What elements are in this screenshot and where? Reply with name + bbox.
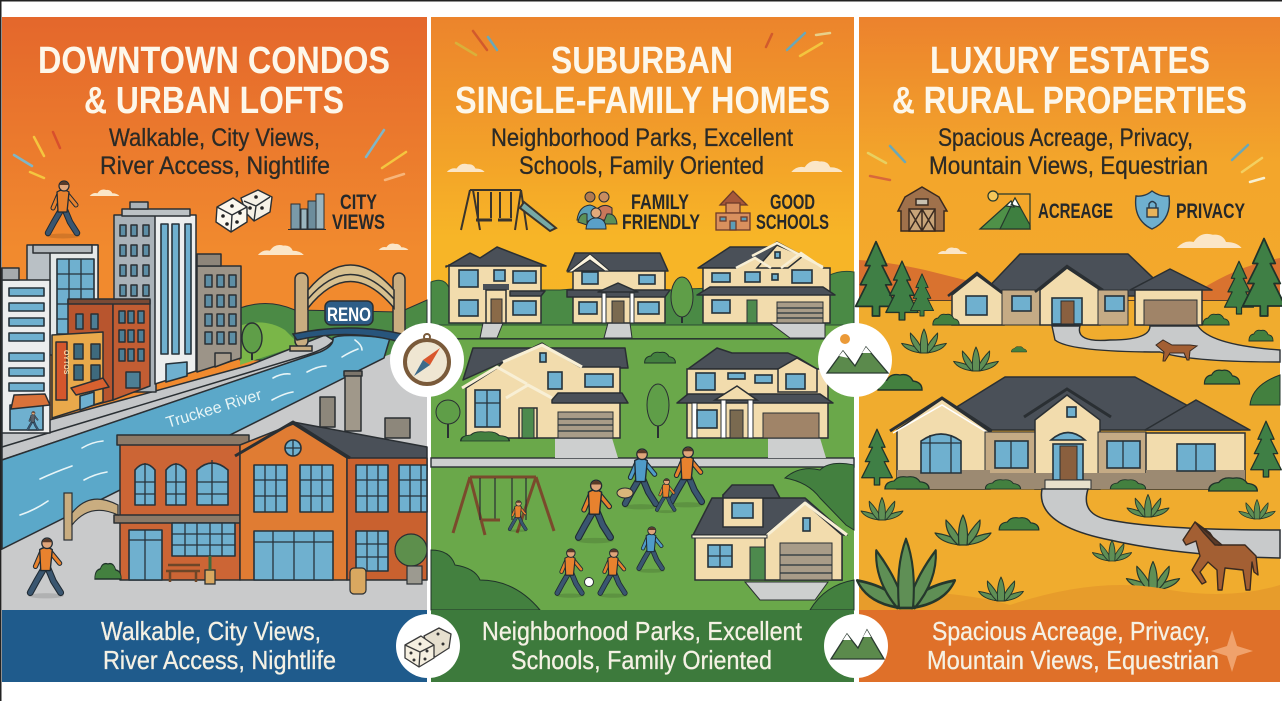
label: family friendly: FAMILY [631, 191, 689, 214]
gateway arch sign [64, 493, 118, 540]
potted tree [395, 534, 427, 584]
label: good schools [756, 191, 829, 234]
estate: upper house [948, 254, 1212, 325]
title [892, 40, 1247, 122]
badge: mountains, footer [824, 614, 888, 678]
tree [242, 323, 262, 360]
icon: swing and slide [461, 190, 556, 231]
building: white apartment block [2, 268, 50, 433]
driveway, upper [1052, 326, 1280, 362]
icon: privacy shield [1136, 191, 1169, 229]
agaves, upper yard [878, 329, 1280, 405]
label: city views: VIEWS [332, 211, 385, 234]
kerb line [2, 342, 332, 447]
tree and shrubs, middle row [436, 352, 675, 441]
footer band [859, 610, 1280, 682]
mailbox [350, 568, 366, 594]
badge: dice [396, 614, 460, 678]
footer band [431, 610, 854, 682]
house: top row, second [567, 253, 670, 323]
subtitle: Schools, Family Oriented [519, 152, 764, 180]
chimneys and vent [320, 371, 410, 438]
house: top row, third [697, 242, 835, 323]
building: tall tower [114, 202, 196, 392]
title [455, 40, 830, 122]
ground [2, 340, 427, 610]
house: lower right [692, 485, 847, 580]
clouds [938, 234, 1242, 254]
footer text: Walkable, City Views, [101, 616, 321, 646]
ground [859, 301, 1280, 610]
child on swing [509, 501, 527, 532]
sand dune foreground [859, 585, 1280, 610]
footer text: Spacious Acreage, Privacy, [932, 616, 1210, 646]
building: grey glass mid-rise [27, 245, 98, 355]
title: LUXURY ESTATES [930, 40, 1210, 82]
bench and planter [166, 556, 215, 584]
trees at right [785, 463, 854, 530]
pathways and road lines [431, 323, 854, 467]
river [2, 336, 390, 549]
hills [240, 300, 427, 360]
horse, upper [1156, 340, 1197, 361]
panel: luxury estates and rural properties [856, 17, 1282, 682]
people: adult and playing children [556, 480, 665, 598]
bushes foreground [431, 550, 854, 610]
label: good schools: GOOD [770, 191, 815, 214]
title: DOWNTOWN CONDOS [38, 40, 390, 82]
building: brick loft left block [114, 435, 249, 580]
subtitle: River Access, Nightlife [100, 152, 330, 180]
agaves, lower yard [861, 494, 1275, 601]
panel: downtown condos and urban lofts [2, 17, 427, 682]
icon: acreage mountains [980, 191, 1030, 229]
footer text: Mountain Views, Equestrian [927, 645, 1219, 675]
footer text: Neighborhood Parks, Excellent [482, 616, 803, 646]
driveway lower right [745, 582, 828, 600]
arch: Reno arch: RENO [327, 305, 371, 326]
label: privacy: PRIVACY [1176, 200, 1245, 223]
subtitle [929, 124, 1208, 180]
footer text [482, 616, 803, 675]
decorative sun rays [456, 31, 830, 56]
label: good schools: SCHOOLS [756, 211, 829, 234]
lawn [431, 312, 854, 610]
clouds [447, 161, 843, 172]
clouds [90, 190, 408, 255]
title: SINGLE-FAMILY HOMES [455, 80, 830, 122]
building: brick loft gabled block [235, 422, 427, 580]
icon: family group [577, 192, 617, 229]
signage text: OYTOS [62, 350, 69, 375]
label: family friendly: FRIENDLY [622, 211, 700, 234]
icon: dice [216, 190, 272, 232]
icon: walking person on skyline [46, 181, 80, 238]
subtitle: Neighborhood Parks, Excellent [491, 124, 793, 152]
panel: suburban single-family homes [431, 17, 854, 682]
icon: city skyline [288, 194, 326, 230]
label: city views [332, 191, 385, 234]
horizon fence line [859, 300, 1280, 302]
footer band [2, 610, 427, 682]
decorative sun rays [868, 145, 1264, 182]
small pedestrian on walkway [27, 411, 39, 431]
badge: mountains [818, 323, 892, 397]
sparkle [1211, 630, 1253, 672]
icon: barn [898, 187, 947, 231]
subtitle [491, 124, 793, 180]
badge: compass [390, 323, 464, 397]
building: brick mid-rise [68, 299, 150, 412]
building: taupe office [197, 254, 241, 372]
footer text: Schools, Family Oriented [511, 645, 772, 675]
estate: lower house [890, 377, 1250, 489]
soccer ball [584, 578, 594, 586]
river ripples [20, 340, 362, 515]
label: city views: CITY [340, 191, 377, 214]
decorative sun rays, left and right [14, 130, 406, 180]
shrubs along lower house [885, 477, 1257, 491]
swing set [453, 477, 554, 535]
footer text: River Access, Nightlife [103, 645, 336, 675]
subtitle [100, 124, 330, 180]
house: top row, first [446, 247, 546, 323]
bush by loft [95, 564, 121, 579]
footer text [927, 616, 1219, 675]
house: middle row, left [462, 343, 628, 438]
people: family holding hands with dog [617, 447, 705, 513]
subtitle: Walkable, City Views, [109, 124, 320, 152]
title: & URBAN LOFTS [84, 80, 344, 122]
icon: school building [716, 191, 750, 230]
hedge background [431, 271, 854, 325]
river label: Truckee River [164, 386, 264, 432]
title [38, 40, 390, 122]
horse, foreground [1183, 522, 1258, 590]
icon: walking person, foreground [28, 538, 64, 598]
subtitle: Spacious Acreage, Privacy, [938, 124, 1193, 152]
river walk [2, 335, 333, 460]
arch: Reno arch [290, 265, 405, 351]
pines flanking lower house [862, 421, 1281, 485]
pines, upper row [856, 238, 1282, 320]
house: middle row, right [677, 348, 833, 438]
building: yellow storefront with signage [52, 332, 109, 418]
driveway, lower [1041, 489, 1280, 558]
label: family friendly [622, 191, 700, 234]
distant orange hills [859, 258, 1280, 300]
shrubs by upper house [933, 314, 1273, 341]
subtitle: Mountain Views, Equestrian [929, 152, 1208, 180]
tree [671, 277, 693, 323]
large agave [857, 539, 955, 608]
footer text [101, 616, 336, 675]
title: SUBURBAN [551, 40, 733, 82]
label: acreage: ACREAGE [1038, 200, 1113, 223]
